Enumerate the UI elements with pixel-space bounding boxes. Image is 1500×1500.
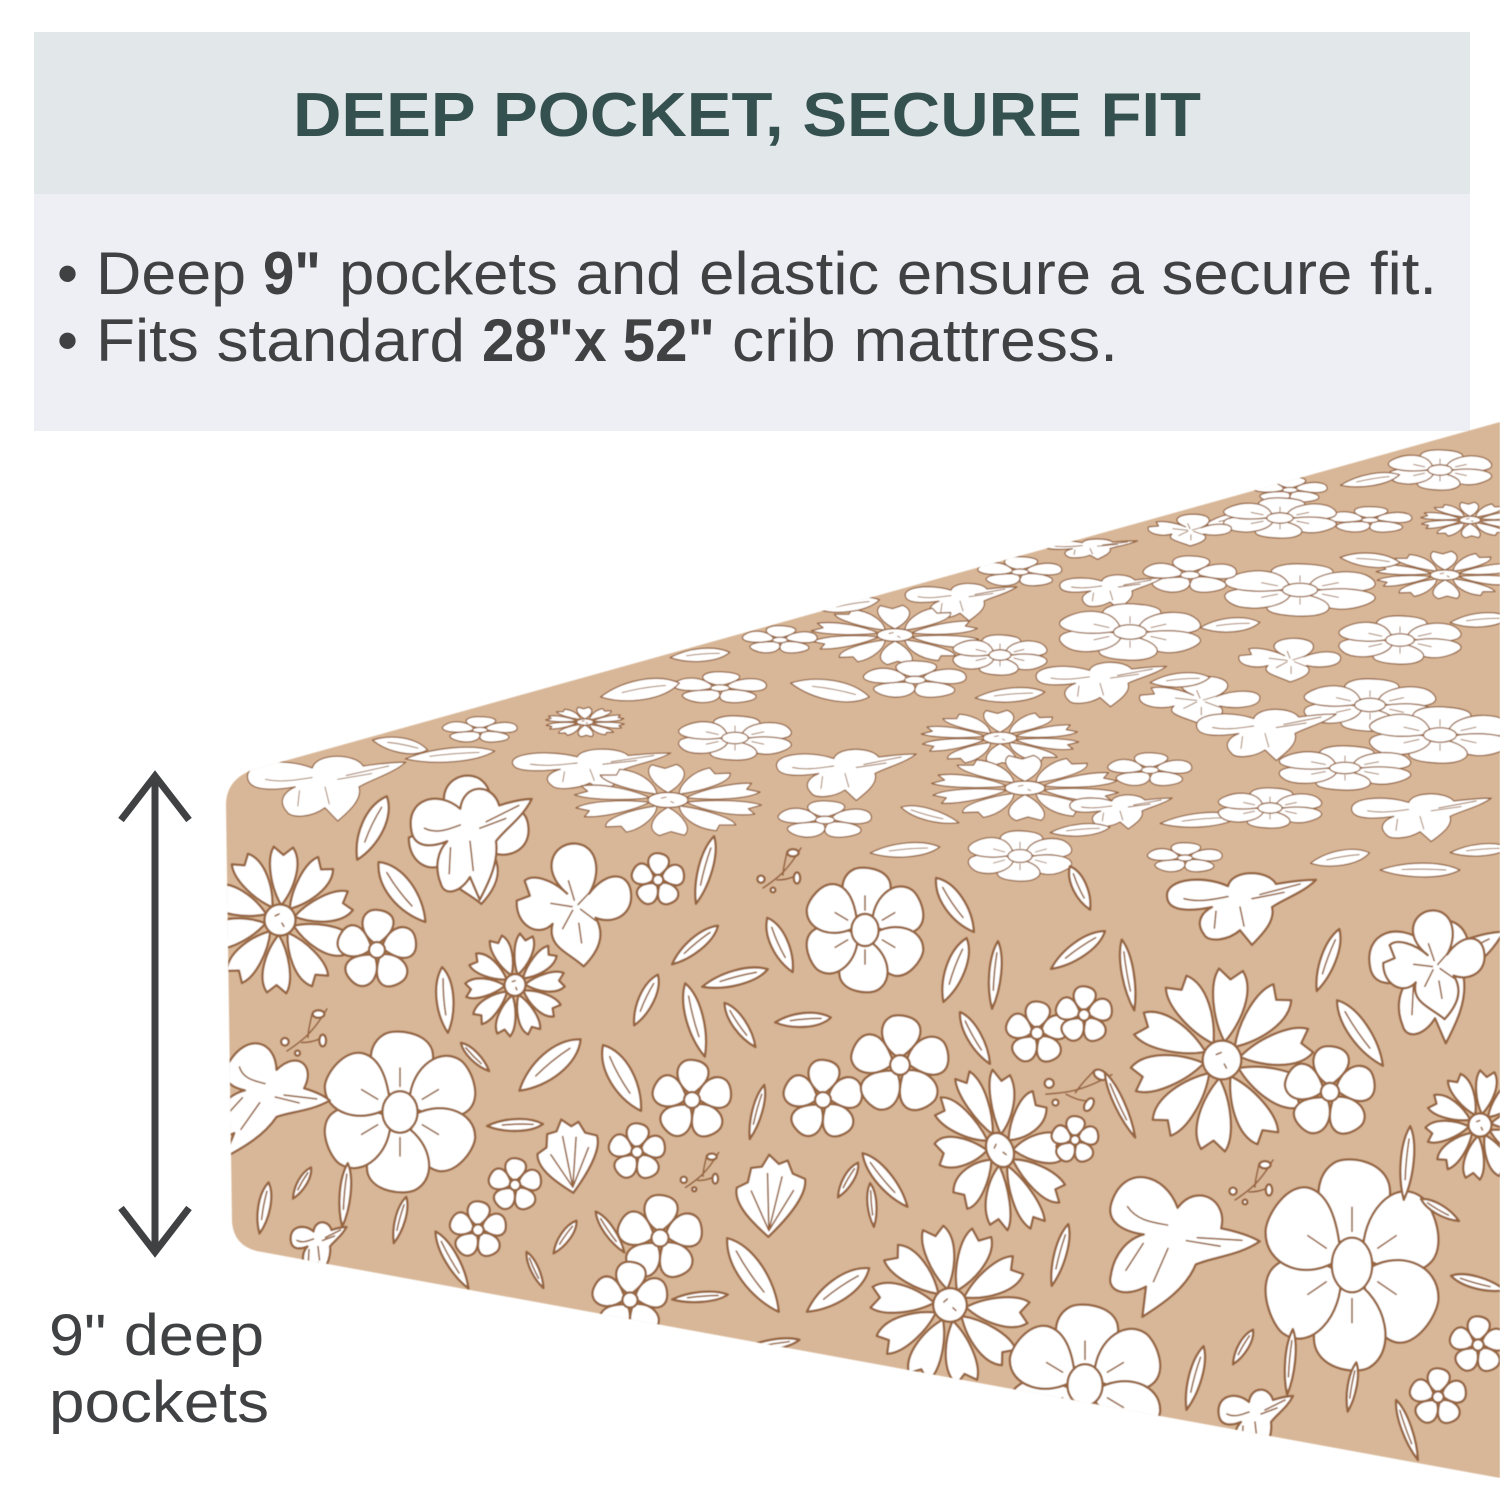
bullet line one: Deep	[96, 240, 246, 307]
bullet line one: •	[57, 240, 78, 307]
panel: title band	[34, 32, 1470, 194]
title: DEEP POCKET, SECURE FIT	[293, 81, 1201, 150]
floral print: top face	[247, 450, 1500, 881]
bullet line two: 28"x 52"	[482, 307, 715, 374]
floral print: front side face	[180, 766, 1500, 1465]
mattress body	[226, 422, 1500, 1478]
depth label: pockets	[49, 1370, 269, 1435]
depth label: 9" deep	[49, 1303, 264, 1368]
depth label	[49, 1303, 269, 1435]
arrow: mattress depth	[121, 776, 189, 1252]
bullet line two: Fits standard	[96, 307, 465, 374]
bullet line two: •	[57, 307, 78, 374]
bullet line one: pockets and elastic ensure a secure fit.	[339, 240, 1437, 307]
bullet line two: crib mattress.	[732, 307, 1118, 374]
panel: feature bullets	[34, 194, 1470, 431]
bullet line two	[57, 307, 1118, 374]
bullet line one: 9"	[263, 240, 321, 307]
mattress illustration	[180, 422, 1500, 1478]
